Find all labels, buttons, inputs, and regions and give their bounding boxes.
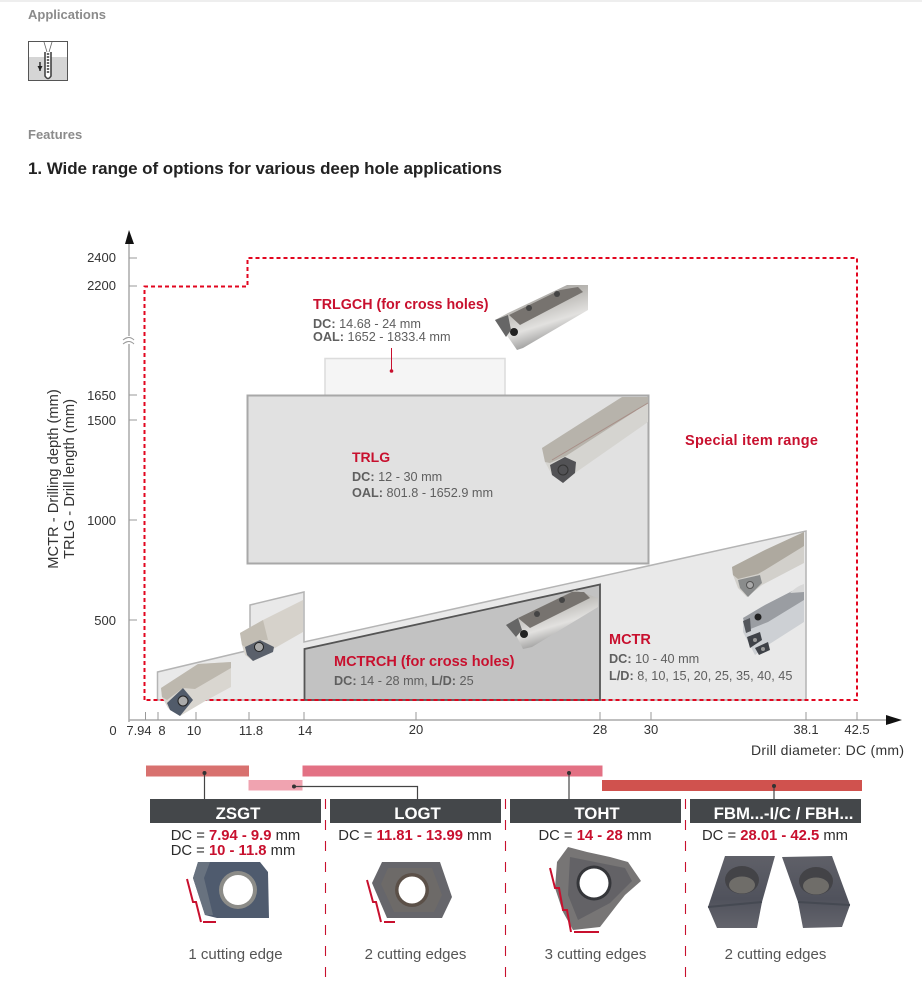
column dividers bbox=[326, 799, 686, 983]
x axis: 11.8 bbox=[239, 723, 263, 738]
region: MCTRCH bbox=[304, 584, 600, 700]
panel: FBM / FBH: DC = 28.01 - 42.5 mm bbox=[702, 828, 848, 844]
insert: LOGT bbox=[367, 862, 452, 922]
panel: LOGT: DC = 11.81 - 13.99 mm bbox=[338, 828, 492, 844]
x axis: 30 bbox=[644, 722, 658, 737]
panel: FBM / FBH: 2 cutting edges bbox=[725, 946, 826, 963]
panel: LOGT: 2 cutting edges bbox=[365, 946, 466, 963]
panel: ZSGT: 1 cutting edge bbox=[188, 946, 283, 963]
label: TRLG bbox=[352, 449, 493, 500]
bar: TOHT bbox=[302, 766, 602, 776]
tool: MCTR lower bbox=[743, 584, 804, 655]
label: MCTRCH bbox=[334, 654, 515, 688]
x axis: 7.94 bbox=[126, 723, 152, 738]
x axis: 28 bbox=[593, 722, 607, 737]
x axis: 42.5 bbox=[844, 722, 870, 737]
y axis: 2400 bbox=[87, 250, 116, 265]
tool: TRLGCH bbox=[495, 285, 588, 350]
x axis bbox=[109, 712, 902, 738]
insert: FBH bbox=[782, 856, 850, 928]
x axis: 20 bbox=[409, 722, 423, 737]
pointer: TRLGCH region bbox=[390, 348, 393, 373]
label: MCTR: L/D: 8, 10, 15, 20, 25, 35, 40, 45 bbox=[609, 669, 792, 683]
x axis: 38.1 bbox=[793, 722, 819, 737]
x axis: 8 bbox=[158, 723, 166, 738]
tool: ZSGT large bbox=[240, 600, 303, 661]
panel: ZSGT: ZSGT bbox=[216, 804, 261, 823]
x axis: 10 bbox=[187, 723, 201, 738]
heading: Features: Features bbox=[28, 127, 82, 142]
panel: FBM / FBH: FBM...-I/C / FBH... bbox=[714, 804, 853, 823]
y axis: 500 bbox=[94, 613, 116, 628]
panel: LOGT: LOGT bbox=[394, 804, 442, 823]
panel: LOGT bbox=[330, 799, 501, 963]
region: TRLG bbox=[248, 396, 648, 564]
insert: ZSGT bbox=[187, 862, 269, 922]
panel: TOHT bbox=[510, 799, 681, 963]
label: TRLGCH: OAL: 1652 - 1833.4 mm bbox=[313, 330, 451, 344]
bar: LOGT bbox=[248, 780, 302, 790]
panel: FBM / FBH bbox=[690, 799, 861, 963]
label: TRLG: OAL: 801.8 - 1652.9 mm bbox=[352, 486, 493, 500]
label: MCTRCH: MCTRCH (for cross holes) bbox=[334, 654, 515, 670]
label: TRLGCH bbox=[313, 297, 489, 344]
panel: ZSGT: DC = 7.94 - 9.9 mm bbox=[171, 828, 300, 844]
tool: ZSGT small bbox=[161, 662, 231, 716]
y axis: 1650 bbox=[87, 388, 116, 403]
label: MCTR: DC: 10 - 40 mm bbox=[609, 652, 699, 666]
panel: ZSGT bbox=[150, 799, 321, 963]
label: TRLGCH: DC: 14.68 - 24 mm bbox=[313, 317, 421, 331]
x axis: 14 bbox=[298, 723, 312, 738]
y axis: 1000 bbox=[87, 513, 116, 528]
special item range boundary bbox=[144, 258, 857, 700]
x axis title: Drill diameter: DC (mm) bbox=[751, 742, 904, 758]
y axis bbox=[87, 230, 137, 722]
label: MCTR bbox=[609, 632, 792, 683]
label: MCTR: MCTR bbox=[609, 632, 651, 648]
label: TRLGCH: TRLGCH (for cross holes) bbox=[313, 297, 489, 313]
bar: ZSGT bbox=[146, 766, 249, 776]
bar: FBM bbox=[602, 780, 862, 791]
y axis title: MCTR - Drilling depth (mm) bbox=[46, 389, 62, 569]
tool: MCTRCH bbox=[506, 590, 598, 649]
insert: FBM bbox=[708, 856, 775, 928]
tool: TRLG bbox=[542, 397, 648, 483]
range bars bbox=[146, 766, 862, 791]
y axis: 2200 bbox=[87, 278, 116, 293]
connectors bbox=[202, 771, 776, 800]
panel: TOHT: TOHT bbox=[574, 804, 620, 823]
heading: Applications: Applications bbox=[28, 7, 106, 22]
panel: TOHT: DC = 14 - 28 mm bbox=[538, 828, 652, 844]
heading: wide range of options: 1. Wide range of options for various deep hole applications bbox=[28, 159, 502, 178]
region: TRLGCH bbox=[325, 358, 505, 396]
label: special item range: Special item range bbox=[685, 433, 818, 449]
y axis title: TRLG - Drill length (mm) bbox=[62, 399, 78, 559]
y axis: 1500 bbox=[87, 413, 116, 428]
region: MCTR bbox=[158, 531, 806, 700]
label: TRLG: DC: 12 - 30 mm bbox=[352, 470, 442, 484]
tool: MCTR upper bbox=[732, 532, 804, 597]
panel: ZSGT: DC = 10 - 11.8 mm bbox=[171, 843, 295, 859]
panel: TOHT: 3 cutting edges bbox=[545, 946, 646, 963]
x axis: 0 bbox=[109, 723, 117, 738]
insert: TOHT bbox=[550, 847, 641, 932]
label: MCTRCH: DC: 14 - 28 mm, L/D: 25 bbox=[334, 674, 474, 688]
chart: drill range bbox=[46, 230, 904, 758]
label: TRLG: TRLG bbox=[352, 449, 390, 465]
icon: deep hole drilling bbox=[28, 42, 68, 80]
